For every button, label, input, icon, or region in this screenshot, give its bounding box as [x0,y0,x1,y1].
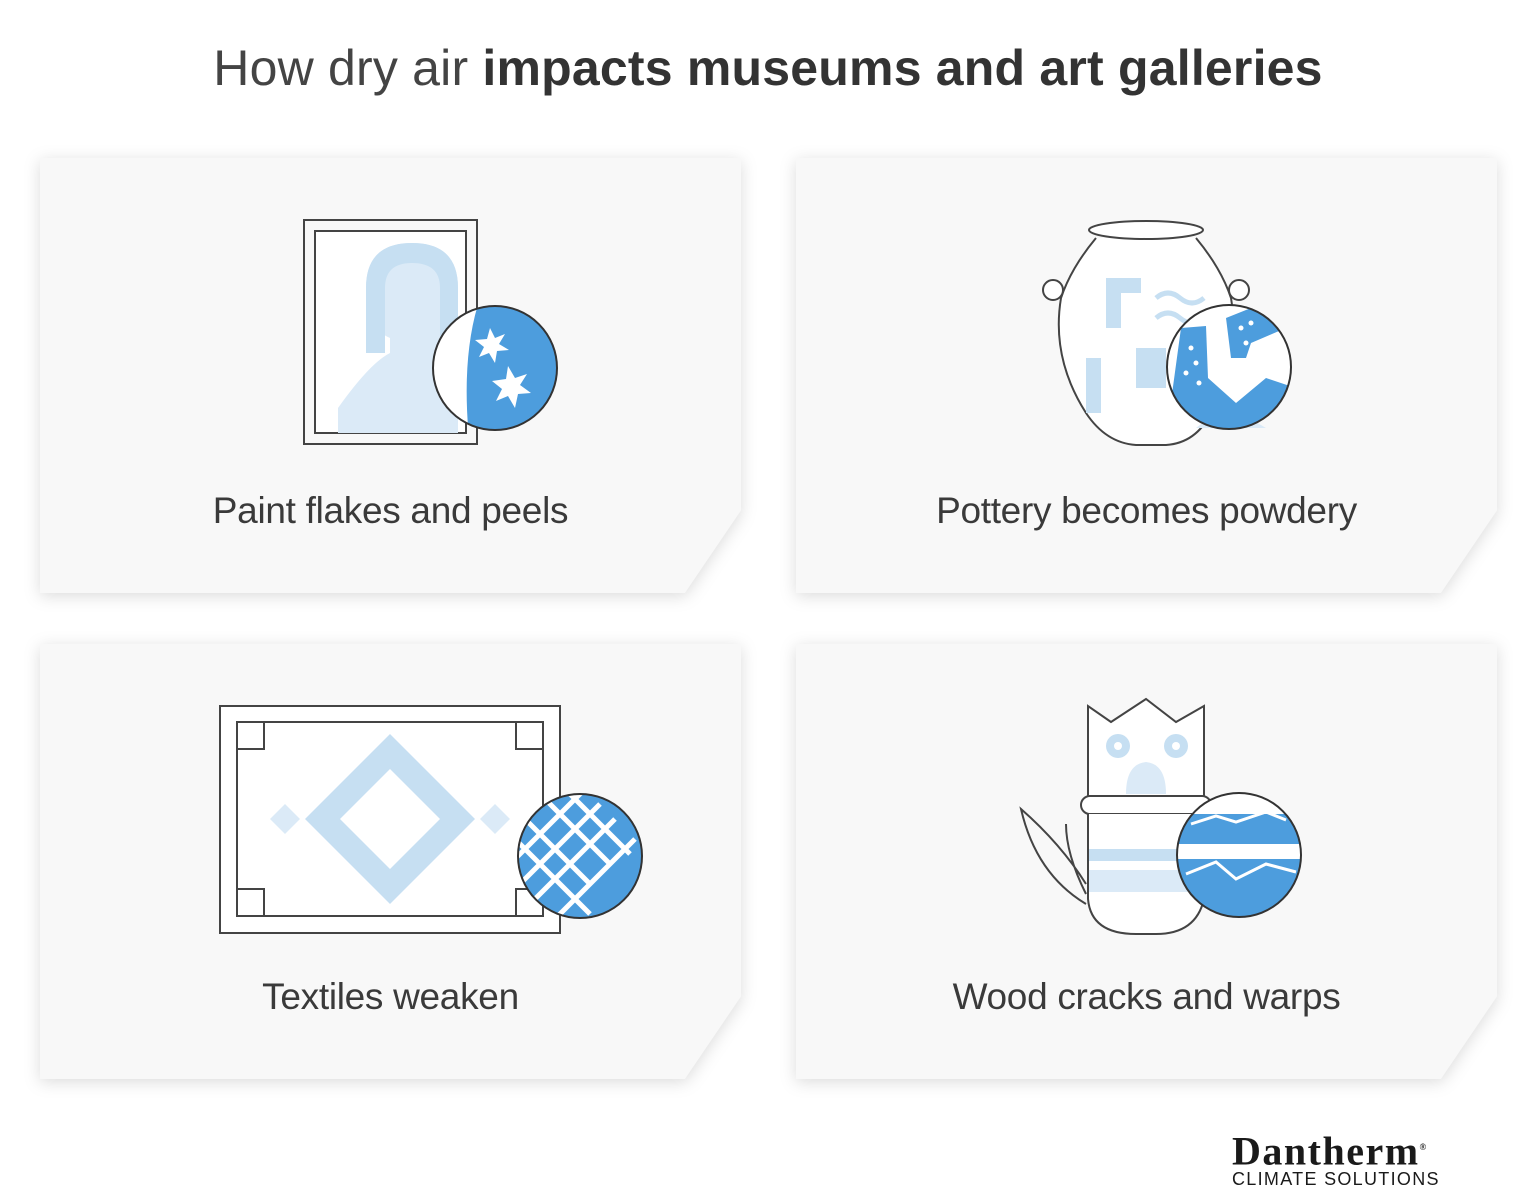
icon: wooden figure [1019,698,1302,935]
logo: CLIMATE SOLUTIONS [1232,1169,1440,1189]
caption: Pottery becomes powdery [936,490,1357,531]
icon: rug [219,705,643,934]
caption: Paint flakes and peels [213,490,568,531]
panel: wood [790,642,1502,1088]
panel: paint [34,156,746,602]
title: How dry air impacts museums and art galleries [213,40,1323,96]
logo [1232,1128,1440,1189]
caption: Textiles weaken [262,976,519,1017]
panel: pottery [790,156,1502,602]
logo: Dantherm® [1232,1128,1428,1173]
icon: painting [303,219,558,445]
caption: Wood cracks and warps [953,976,1340,1017]
panel: textiles [34,642,746,1088]
icon: vase [1042,220,1292,446]
